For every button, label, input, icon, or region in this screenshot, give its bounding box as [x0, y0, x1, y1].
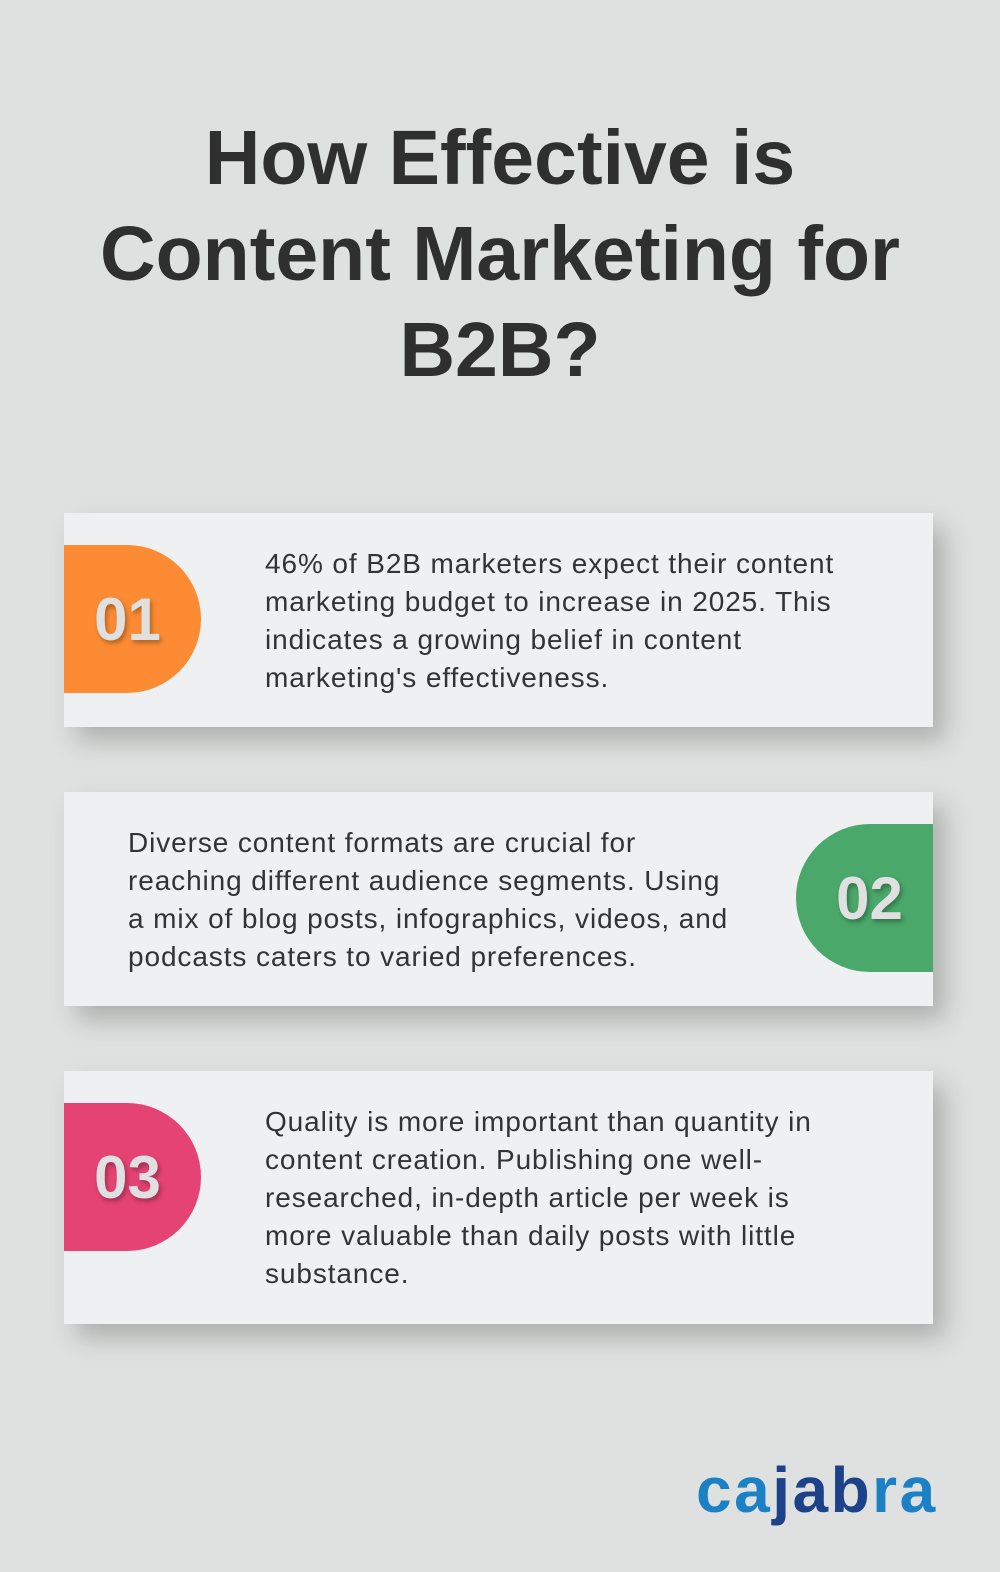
text 01: marketing's effectiveness.	[265, 662, 609, 693]
text 03: researched, in-depth article per week is	[265, 1182, 790, 1213]
text 03: more valuable than daily posts with little	[265, 1220, 796, 1251]
title: B2B?	[399, 307, 601, 393]
text 01: 46% of B2B marketers expect their content	[265, 548, 834, 579]
title: Content Marketing for	[100, 211, 900, 297]
text 03	[265, 1106, 812, 1289]
text 02: Diverse content formats are crucial for	[128, 827, 636, 858]
text 03: substance.	[265, 1258, 409, 1289]
panel: card 01	[64, 513, 933, 727]
badge 02: 02	[836, 864, 903, 932]
panel: card 03	[64, 1071, 933, 1324]
text 02: reaching different audience segments. Using	[128, 865, 720, 896]
badge 03	[64, 1103, 201, 1251]
badge 01	[64, 545, 201, 693]
logo: cajabra	[696, 1454, 938, 1526]
text 01: indicates a growing belief in content	[265, 624, 742, 655]
text 01: marketing budget to increase in 2025. This	[265, 586, 832, 617]
text 02: podcasts caters to varied preferences.	[128, 941, 637, 972]
text 01	[265, 548, 834, 693]
badge 01: 01	[94, 586, 161, 652]
text 02: a mix of blog posts, infographics, videos, and	[128, 903, 728, 934]
badge 03: 03	[94, 1144, 161, 1210]
title	[100, 115, 900, 393]
text 03: Quality is more important than quantity in	[265, 1106, 812, 1137]
title: How Effective is	[205, 115, 795, 201]
text 02	[128, 827, 728, 972]
panel: card 02	[64, 792, 933, 1006]
badge 02	[796, 824, 933, 972]
text 03: content creation. Publishing one well-	[265, 1144, 763, 1175]
